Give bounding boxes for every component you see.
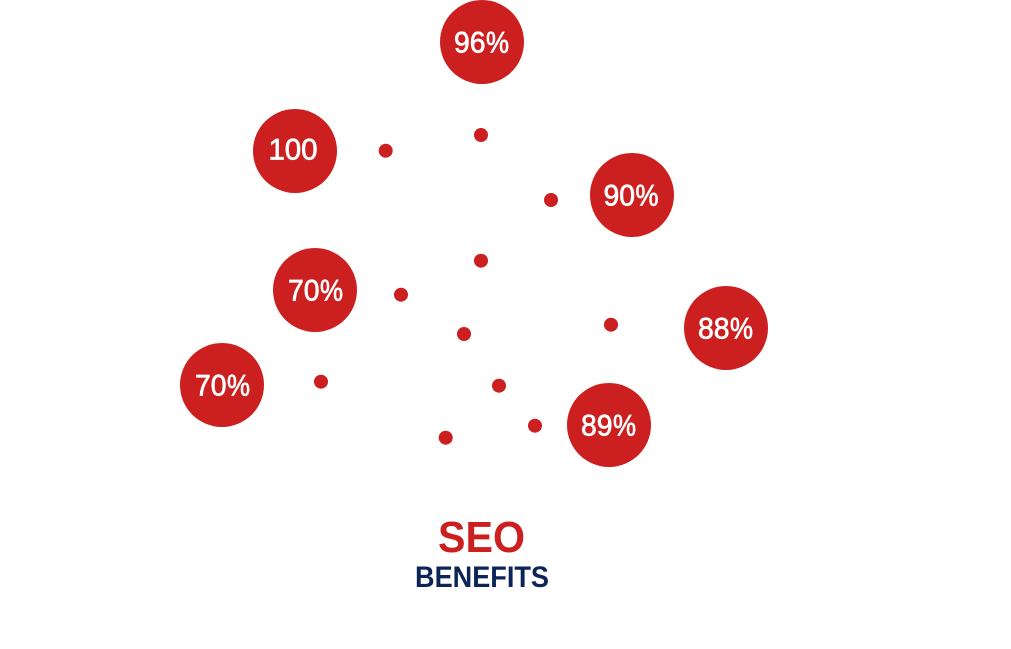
badge: 70% lower [180,343,264,427]
badge: 70% upper: 70% [288,274,343,308]
badge: 96%: 96% [454,26,509,60]
badge: 88%: 88% [698,312,753,346]
badge: 100 [253,109,337,193]
badge: 88% [684,286,768,370]
badge: 70% upper [273,248,357,332]
badge: 89%: 89% [581,410,636,442]
marker dots [314,128,618,445]
badge: 70% lower: 70% [195,370,250,402]
badge: 90% [590,153,674,237]
badge: 90%: 90% [604,180,658,212]
badge: 89% [567,383,651,467]
badge: 96% [440,0,524,84]
heading: SEO: SEO [438,513,525,562]
badge: 100: 100 [268,134,318,166]
heading: BENEFITS: BENEFITS [415,561,549,594]
